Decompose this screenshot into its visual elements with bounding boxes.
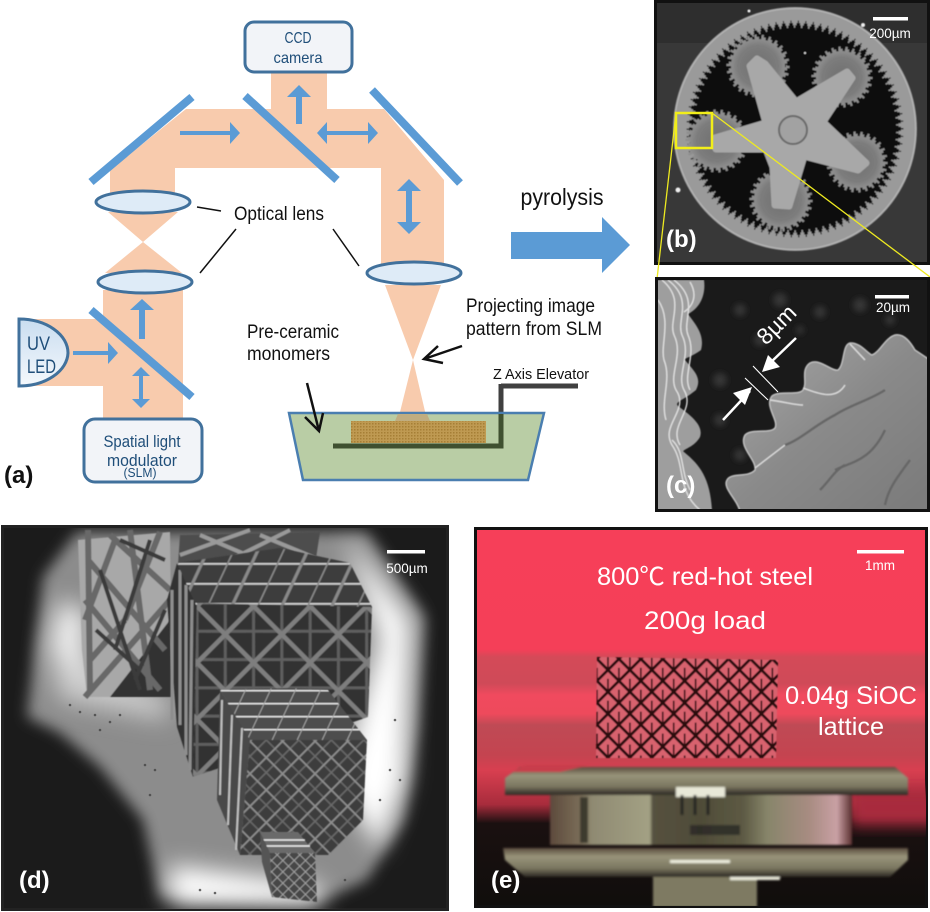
panel label d: (d) — [19, 867, 50, 894]
optical lens label and leader lines: Optical lens — [234, 204, 324, 225]
8 micrometre gap annotation — [723, 299, 801, 420]
scale bar 1 mm — [857, 550, 904, 573]
vignette substrate — [27, 532, 425, 903]
scale bar 20 micrometres: 20µm — [876, 300, 910, 315]
UV LED source: UV — [27, 334, 50, 355]
spatial light modulator box — [84, 419, 202, 482]
panel label e: (e) — [491, 867, 520, 894]
scale bar 200 micrometres: 200µm — [869, 26, 911, 41]
UV LED source — [19, 319, 68, 386]
scale bar 500 micrometres: 500µm — [386, 561, 428, 576]
scale bar 200 micrometres — [869, 17, 911, 41]
small lattice cube — [260, 832, 317, 902]
right side red extension — [850, 790, 930, 826]
steel weight — [503, 765, 908, 907]
collapsed back cube — [78, 530, 320, 697]
resin tub with elevator: Z Axis Elevator — [493, 366, 589, 383]
beam direction arrows — [73, 85, 421, 408]
lattice mass caption: 0.04g SiOC — [785, 682, 917, 710]
dark substrate texture — [713, 293, 895, 461]
heat and load caption: 200g load — [644, 607, 766, 635]
projection label and arrow: pattern from SLM — [466, 319, 602, 340]
spatial light modulator box: modulator — [107, 451, 177, 470]
spatial light modulator box: (SLM) — [124, 465, 156, 480]
lattice mass caption — [785, 682, 917, 741]
CCD camera box: CCD — [284, 30, 312, 47]
panel: (a) optical setup schematic — [4, 22, 602, 489]
optical lens label and leader lines — [197, 204, 359, 273]
scale bar 500 micrometres — [386, 550, 428, 576]
projection label and arrow: Projecting image — [466, 296, 595, 317]
CCD camera box — [245, 22, 352, 72]
panel label a: (a) — [4, 462, 33, 489]
SiOC lattice block — [596, 657, 778, 758]
panel label b: (b) — [666, 226, 697, 253]
large lattice cube — [167, 548, 372, 777]
panel label c: (c) — [666, 472, 695, 499]
medium lattice cube — [217, 688, 367, 855]
UV LED source: LED — [27, 357, 56, 378]
panel: (d) SEM lattice structures — [2, 526, 448, 910]
heat and load caption: 800℃ red-hot steel — [597, 563, 813, 591]
lattice mass caption: lattice — [818, 713, 884, 741]
yellow zoom connector lines — [657, 113, 930, 279]
panel: (c) SEM tooth close-up — [650, 278, 930, 512]
optical mirrors — [91, 90, 460, 397]
residue dots on substrate — [69, 704, 401, 894]
light beam path — [30, 73, 444, 420]
panel: (b) SEM planetary gear — [656, 2, 928, 264]
zoom region marker — [676, 113, 712, 148]
gear mechanism — [673, 7, 917, 251]
central star carrier — [715, 59, 866, 206]
spatial light modulator box: Spatial light — [104, 432, 181, 451]
projection label and arrow — [424, 296, 602, 363]
CCD camera box: camera — [274, 50, 323, 67]
pyrolysis arrow and label: pyrolysis — [520, 184, 604, 210]
resin tub with elevator — [289, 366, 589, 480]
panel: (e) photo of lattice on hot steel — [476, 528, 930, 907]
scale bar 1 mm: 1mm — [865, 558, 895, 573]
left gear edge — [658, 280, 713, 509]
pre-ceramic monomers label: Pre-ceramic — [247, 322, 339, 343]
heat and load caption — [597, 563, 813, 635]
8 micrometre gap annotation: 8µm — [751, 299, 801, 350]
optical lenses — [96, 191, 461, 293]
pre-ceramic monomers label — [247, 322, 339, 365]
pre-ceramic monomers label: monomers — [247, 344, 330, 365]
large gear teeth — [726, 335, 930, 512]
pyrolysis arrow and label — [511, 184, 630, 273]
